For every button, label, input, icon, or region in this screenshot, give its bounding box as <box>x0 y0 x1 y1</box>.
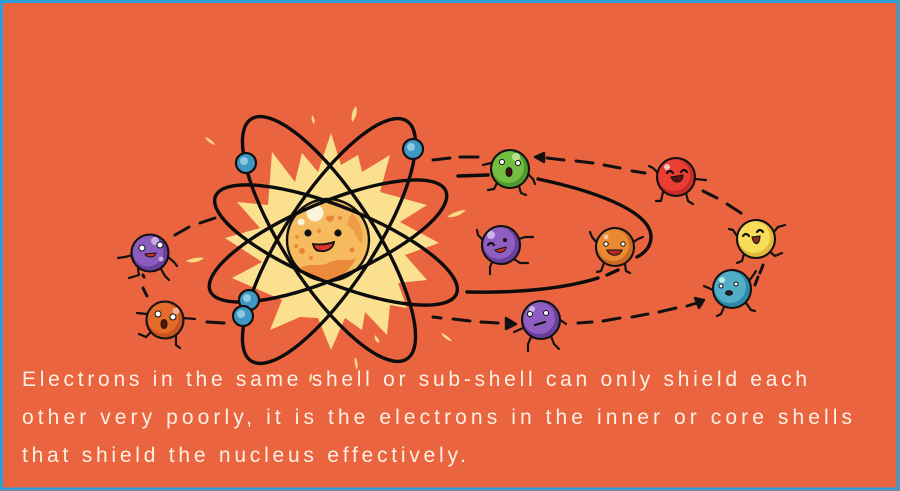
character: orange electron inner <box>590 228 643 273</box>
atom orbits <box>195 95 471 385</box>
explanatory text <box>22 368 852 467</box>
sparks around the burst <box>186 106 466 383</box>
character: purple electron lower <box>514 301 566 351</box>
character: green electron <box>483 150 535 195</box>
explanatory text: that shield the nucleus effectively. <box>22 444 466 467</box>
icon: blue electrons on the atom <box>233 139 423 326</box>
explanatory text: other very poorly, it is the electrons in the inner or core shells <box>22 406 852 429</box>
solid inner shell path <box>458 175 651 292</box>
character: red electron <box>649 158 706 204</box>
character: purple electron inner <box>477 226 533 274</box>
character: teal electron <box>704 270 756 316</box>
explanatory text: Electrons in the same shell or sub-shell can only shield each <box>22 368 807 391</box>
character: purple electron left <box>118 234 177 280</box>
character: orange electron left <box>137 302 195 348</box>
character: yellow electron <box>729 220 785 263</box>
icon: yellow starburst <box>225 133 439 350</box>
dashed orbit paths and arrows <box>143 153 763 329</box>
icon: nucleus with smiling face <box>287 199 369 281</box>
